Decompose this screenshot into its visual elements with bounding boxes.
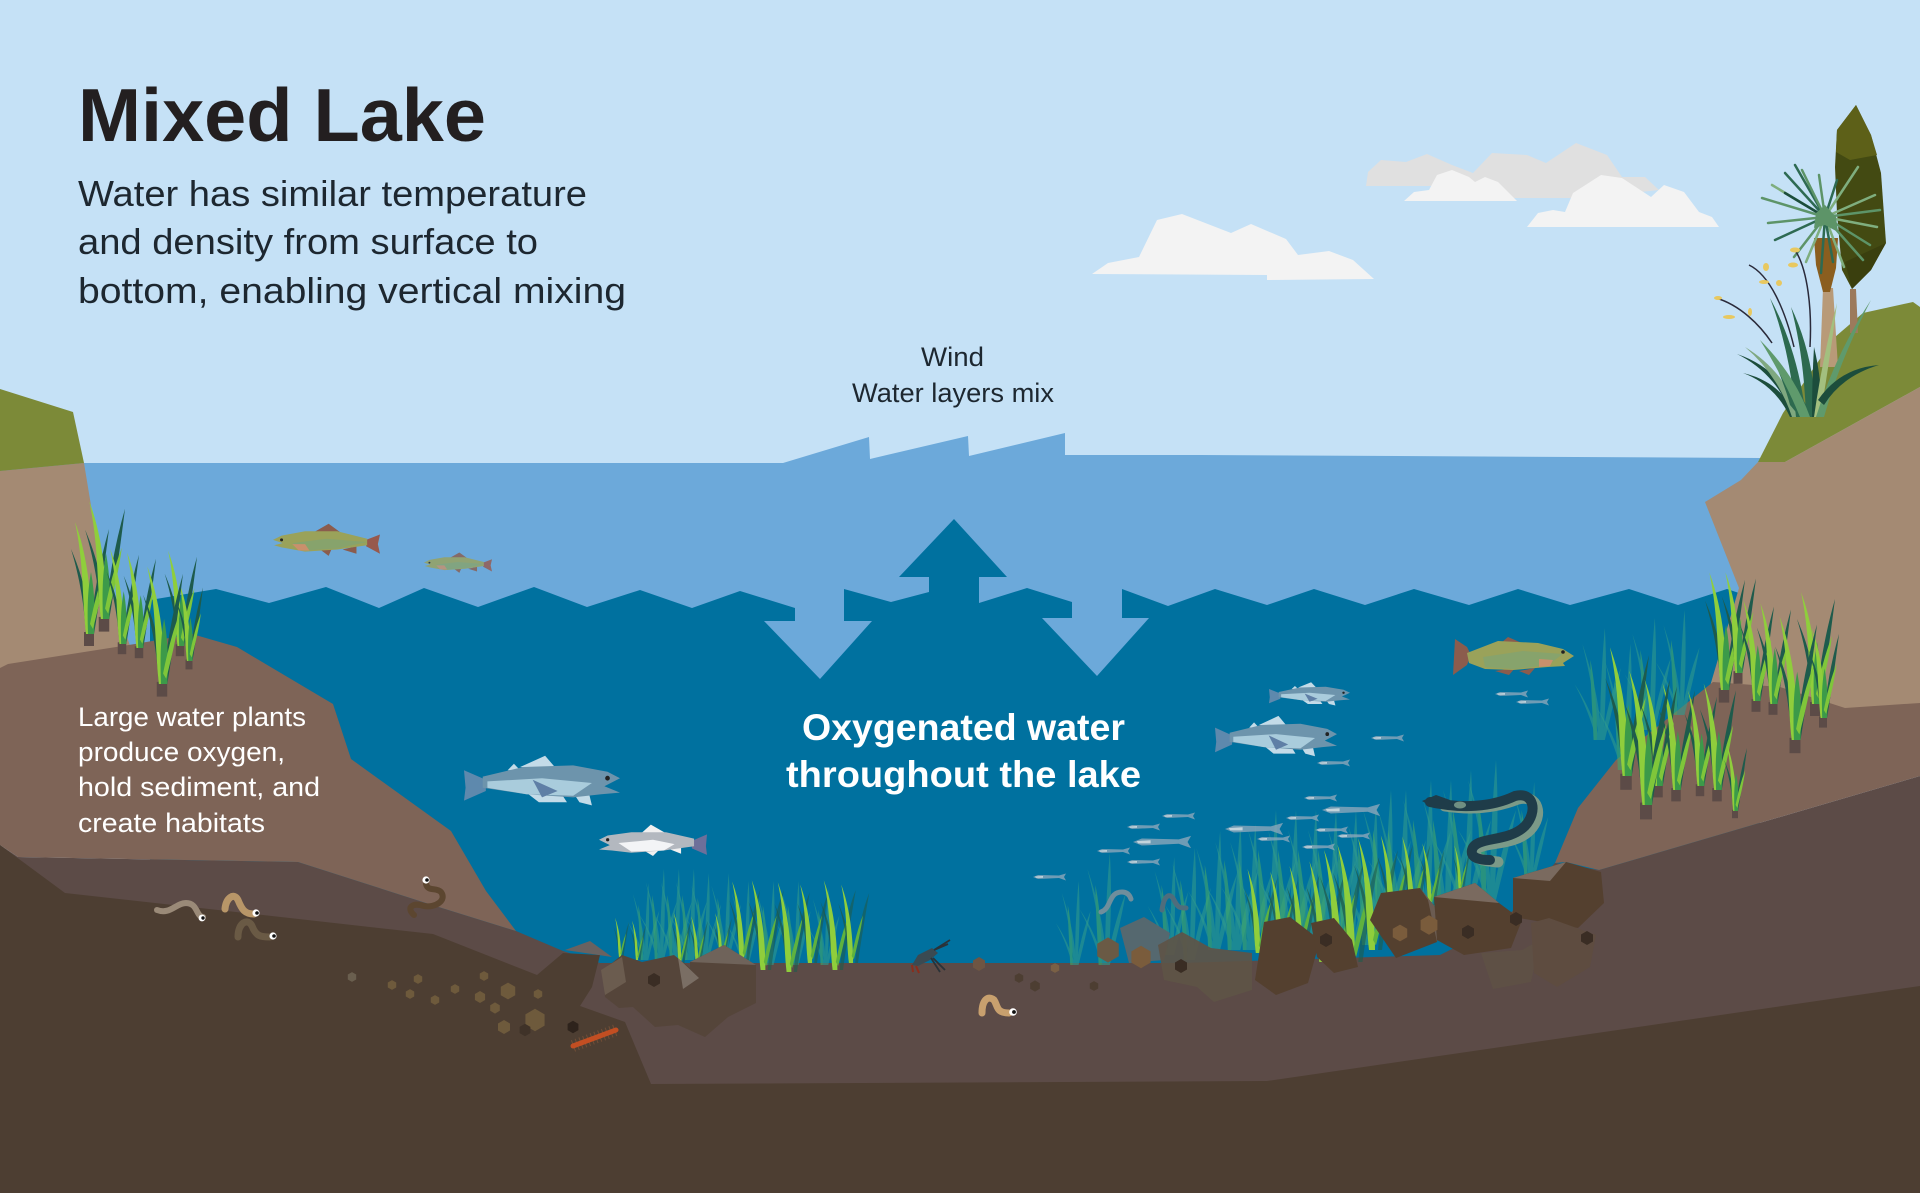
- faint worms in water: [1101, 892, 1186, 912]
- rocks on lakebed left: [565, 941, 756, 1037]
- terrain: left green hill: [0, 389, 84, 471]
- olive trout surface left: [273, 524, 380, 556]
- terrain: dark bedrock: [0, 845, 1920, 1193]
- deep water layer with mixing arrows: [150, 519, 1760, 1000]
- worm 4: [410, 876, 443, 915]
- pebbles in sediment: [348, 957, 1098, 1036]
- plants label: hold sediment, and: [78, 772, 320, 802]
- subtitle: and density from surface to: [78, 221, 538, 262]
- blue trout left: [464, 756, 620, 805]
- worm 2: [225, 896, 260, 917]
- worm 3: [238, 922, 277, 940]
- plants label: produce oxygen,: [78, 737, 285, 767]
- title: Mixed Lake: [78, 73, 486, 157]
- eel: [1422, 795, 1538, 862]
- plants label: Large water plants: [78, 702, 306, 732]
- crayfish: [912, 940, 950, 973]
- wind label: Water layers mix: [852, 378, 1054, 408]
- clouds: [1092, 143, 1719, 280]
- blue fish right large: [1215, 716, 1337, 756]
- oxygenated water label: throughout the lake: [786, 754, 1141, 795]
- upper water layer with wind-driven surface: [0, 433, 1760, 700]
- centipede: [573, 1030, 616, 1046]
- small olive trout surface: [424, 552, 492, 573]
- terrain: mid-dark sediment layer: [0, 776, 1920, 1193]
- terrain: right brown slope: [1555, 682, 1920, 870]
- terrain: left brown slope: [0, 634, 516, 931]
- terrain: left beige bank: [0, 463, 135, 680]
- wind label: Wind: [921, 342, 984, 372]
- flax plant: [1714, 248, 1879, 417]
- worm 5: [982, 998, 1017, 1016]
- plants label: [78, 702, 320, 838]
- plants label: create habitats: [78, 808, 265, 838]
- palm: [1762, 165, 1880, 367]
- olive carp right: [1453, 637, 1574, 675]
- left shore water plants: [71, 501, 203, 697]
- tree: [1835, 105, 1886, 333]
- oxygenated water label: Oxygenated water: [802, 707, 1125, 748]
- subtitle: [78, 173, 626, 311]
- silver fish: [599, 825, 707, 856]
- terrain: right beige bank: [1700, 387, 1920, 720]
- oxygenated water label: [786, 707, 1141, 795]
- worm 1: [157, 903, 205, 921]
- school of small fish: [1033, 690, 1549, 880]
- wind label: [852, 342, 1054, 408]
- subtitle: bottom, enabling vertical mixing: [78, 270, 626, 311]
- terrain: right green hill: [1758, 302, 1920, 462]
- blue fish right small: [1269, 682, 1350, 706]
- rocks on lakebed right: [1097, 862, 1604, 1002]
- subtitle: Water has similar temperature: [78, 173, 587, 214]
- lakebed grass right: [1056, 760, 1548, 965]
- right shore water plants: [1574, 572, 1839, 819]
- lakebed grass left: [614, 869, 869, 972]
